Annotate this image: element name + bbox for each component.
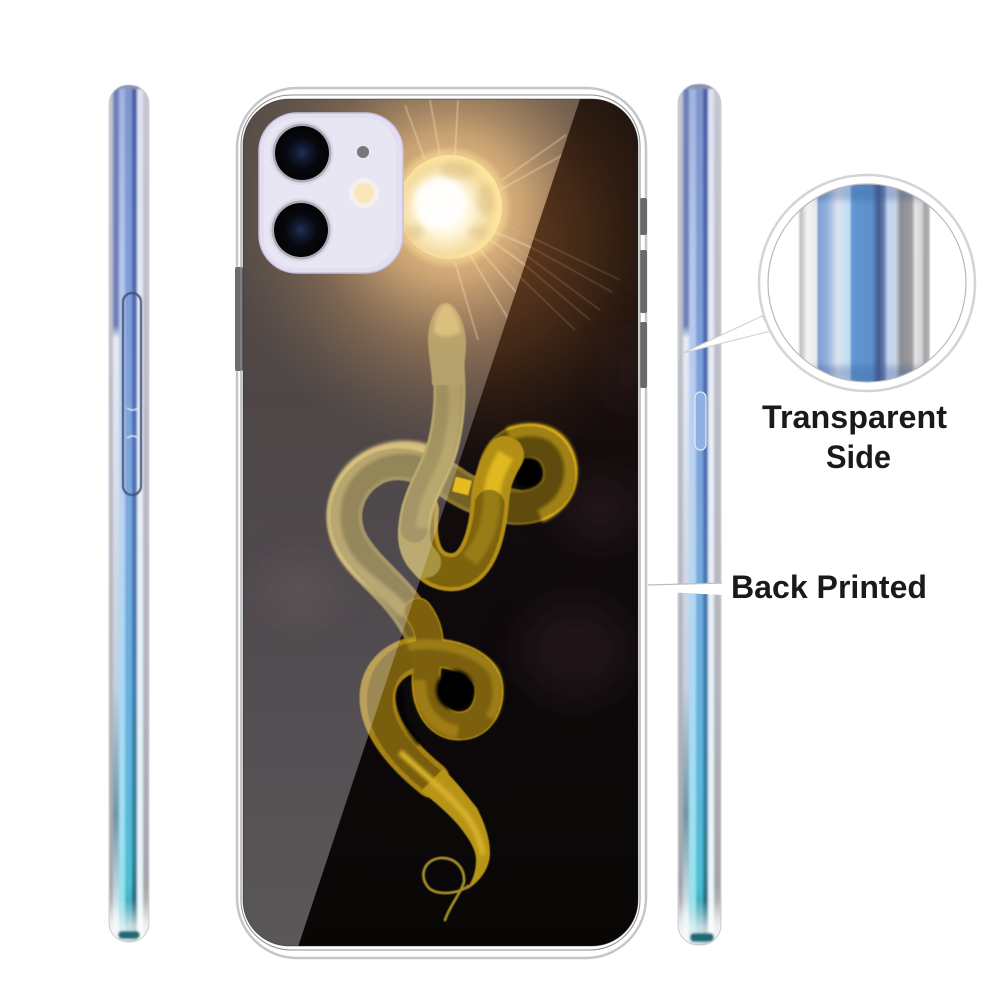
- snake: neck and body: [414, 345, 455, 562]
- magnifier callout: transparent side: [683, 170, 975, 400]
- dark clouds: [276, 485, 633, 698]
- snake illustration: [334, 303, 571, 920]
- lens inner edge: [768, 184, 966, 382]
- sun rays on dark side: [518, 238, 620, 330]
- right side button: [695, 392, 706, 450]
- left side outline: [109, 85, 149, 942]
- back printed pointer: [648, 583, 722, 595]
- camera module: [259, 113, 403, 273]
- snake: outer descending band: [378, 653, 432, 780]
- right side buttons: [640, 198, 647, 388]
- glass reflection diagonal: [243, 99, 580, 947]
- magnified stripes: [798, 184, 930, 382]
- flash: [349, 178, 379, 208]
- lens ring: [759, 175, 975, 391]
- phone case with back print: [235, 86, 648, 960]
- moon glow on dark side: [300, 100, 638, 434]
- label: Transparent Side: Transparent: [762, 399, 947, 435]
- snake: head: [428, 303, 466, 385]
- label: Back Printed: Back Printed: [731, 569, 927, 605]
- lens top: [270, 121, 334, 185]
- left volume button: [235, 267, 243, 371]
- transparent case frame: [237, 88, 646, 958]
- snake: lower loop: [378, 612, 497, 780]
- case inner rim line: [241, 95, 640, 950]
- label: Transparent Side: Side: [826, 439, 891, 475]
- snake: tail: [400, 752, 490, 920]
- screen edge line: [243, 99, 638, 946]
- snake: heart loop and stub: [334, 447, 515, 630]
- pointer wedge: [683, 316, 771, 353]
- left side buttons: [123, 293, 141, 495]
- moon glow on glass: [248, 99, 580, 404]
- label: Transparent Side: [762, 399, 947, 475]
- right side view of the case: [678, 84, 722, 946]
- lens bottom: [269, 198, 333, 262]
- snake: lower S band: [419, 455, 506, 572]
- snake: upper right ring: [495, 430, 571, 516]
- printed back panel: [243, 99, 638, 946]
- microphone: [357, 146, 369, 158]
- right side outline: [678, 84, 721, 945]
- moon: [392, 149, 508, 265]
- left side view of the case: [108, 84, 150, 942]
